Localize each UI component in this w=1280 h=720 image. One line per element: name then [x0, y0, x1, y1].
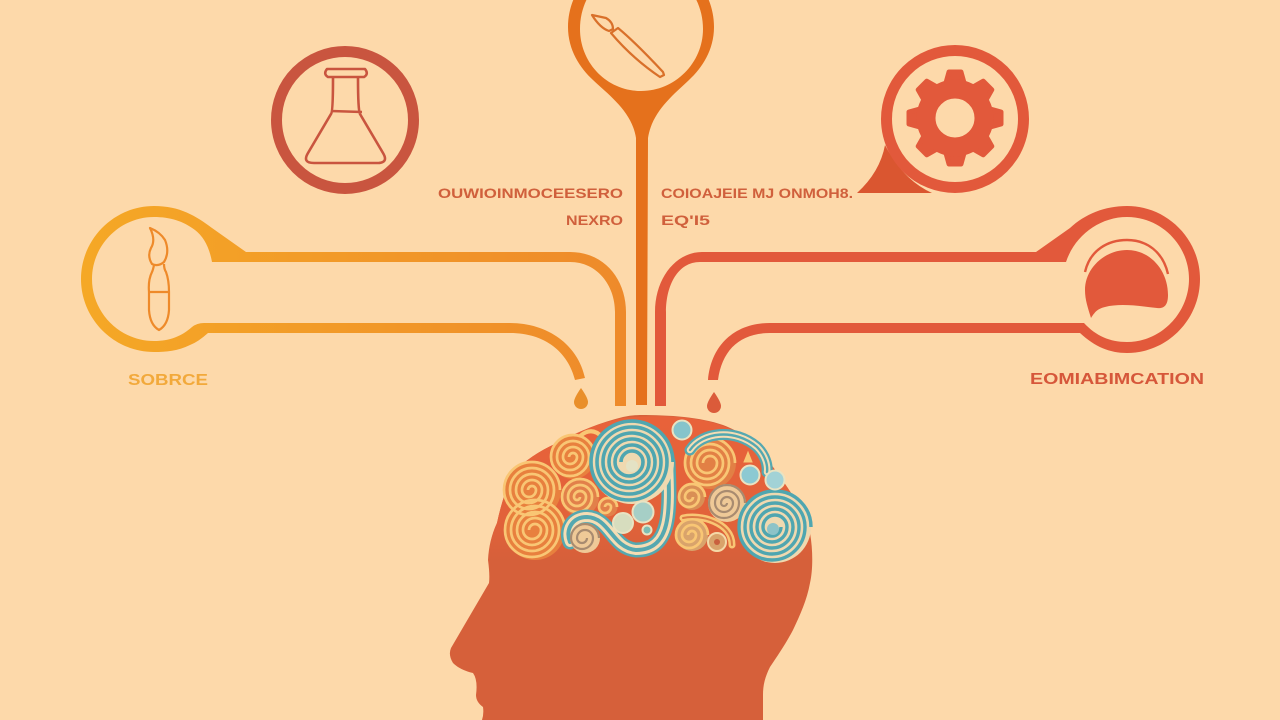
orange spirals [503, 431, 752, 560]
icon: dome [1085, 250, 1168, 318]
left connector: paintbrush source [81, 206, 626, 409]
icon: upright paintbrush [149, 228, 169, 330]
brain swirls [503, 420, 811, 563]
label: communication: EOMIABIMCATION [1030, 371, 1204, 388]
left drop [574, 388, 588, 409]
icon: flask in circle [276, 52, 414, 188]
tan and teal spiral [708, 484, 746, 522]
right drop [707, 392, 721, 413]
label: center right [661, 185, 853, 228]
label: center right: COIOAJEIE MJ ONMOH8. [661, 185, 853, 201]
large teal spiral [590, 420, 674, 504]
label: center right: EQ'I5 [661, 212, 710, 228]
brain swirl base tint [489, 416, 811, 562]
icon: top paintbrush pin [568, 0, 714, 405]
icon: gear speech circle [857, 50, 1024, 193]
label: center left [438, 185, 623, 228]
head silhouette [450, 415, 812, 720]
teal ribbon tails [568, 435, 767, 550]
label: source: SOBRCE [128, 372, 208, 389]
label: center left: OUWIOINMOCEESERO [438, 185, 623, 201]
small teal bubbles [613, 420, 784, 534]
small spiral on ribbon end [570, 523, 600, 553]
lower right teal spiral [739, 491, 811, 563]
orange ribbon tail [683, 517, 732, 551]
label: center left: NEXRO [566, 212, 623, 228]
right connector: head dome [655, 206, 1200, 413]
